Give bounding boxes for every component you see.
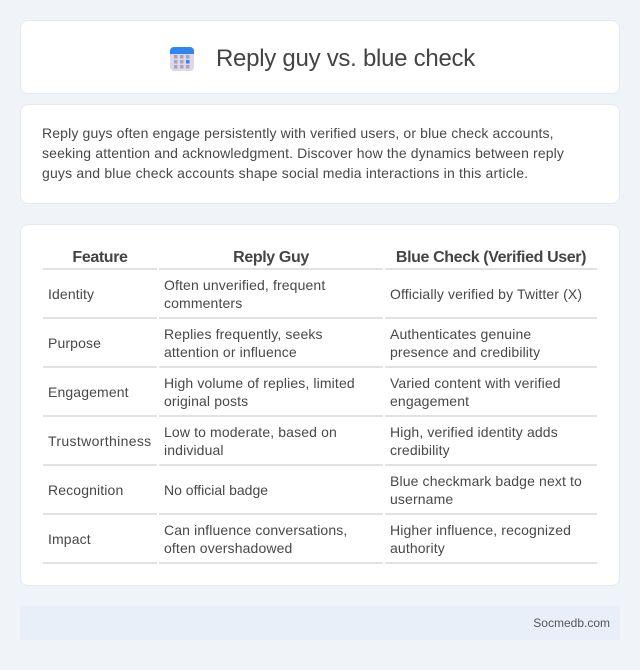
row: Engagement: Varied content with verified [390, 375, 561, 391]
row: Identity: Officially verified by Twitter (X) [390, 286, 582, 302]
row: Impact: Impact [48, 531, 91, 547]
row: Trustworthiness: individual [164, 442, 224, 458]
header: Feature: Feature [72, 249, 128, 266]
title: Reply guy vs. blue check [216, 45, 475, 72]
row: Trustworthiness: Low to moderate, based on [164, 424, 337, 440]
row: Engagement: High volume of replies, limited [164, 375, 355, 391]
intro text panel [20, 104, 620, 204]
row: Recognition [48, 473, 582, 507]
row: Impact: Higher influence, recognized [390, 522, 571, 538]
row: Engagement: Engagement [48, 384, 129, 400]
intro paragraph: seeking attention and acknowledgment. Discover how the dynamics between reply [42, 145, 564, 161]
row: Engagement: engagement [390, 393, 469, 409]
row: Purpose: Purpose [48, 335, 101, 351]
row: Identity: Often unverified, frequent [164, 277, 325, 293]
footer credit: Socmedb.com [533, 616, 610, 630]
row: Purpose: Authenticates genuine [390, 326, 531, 342]
header: Blue Check: Blue Check (Verified User) [396, 249, 586, 266]
row: Engagement [48, 375, 561, 409]
intro paragraph: Reply guys often engage persistently with verified users, or blue check accounts, [42, 125, 554, 141]
row: Recognition: username [390, 491, 453, 507]
row: Engagement: original posts [164, 393, 248, 409]
intro paragraph: guys and blue check accounts shape social media interactions in this article. [42, 165, 528, 181]
table panel [20, 224, 620, 586]
row: Identity [48, 277, 582, 311]
row: Trustworthiness: High, verified identity adds [390, 424, 558, 440]
row: Purpose [48, 326, 540, 360]
row: Trustworthiness: credibility [390, 442, 450, 458]
title card [20, 20, 620, 94]
row: Identity: commenters [164, 295, 242, 311]
row: Impact [48, 522, 571, 556]
row: Trustworthiness [48, 424, 558, 458]
footer bar [20, 606, 620, 640]
row: Purpose: presence and credibility [390, 344, 540, 360]
header: Reply Guy: Reply Guy [233, 249, 309, 266]
row: Identity: Identity [48, 286, 94, 302]
row: Purpose: attention or influence [164, 344, 297, 360]
row: Trustworthiness: Trustworthiness [48, 433, 152, 449]
row: Impact: Can influence conversations, [164, 522, 347, 538]
icon: calendar [170, 47, 194, 71]
row: Recognition: No official badge [164, 482, 268, 498]
row: Impact: often overshadowed [164, 540, 292, 556]
row: Recognition: Recognition [48, 482, 123, 498]
row: Purpose: Replies frequently, seeks [164, 326, 323, 342]
intro paragraph [42, 125, 564, 181]
row: Recognition: Blue checkmark badge next to [390, 473, 582, 489]
row: Impact: authority [390, 540, 445, 556]
